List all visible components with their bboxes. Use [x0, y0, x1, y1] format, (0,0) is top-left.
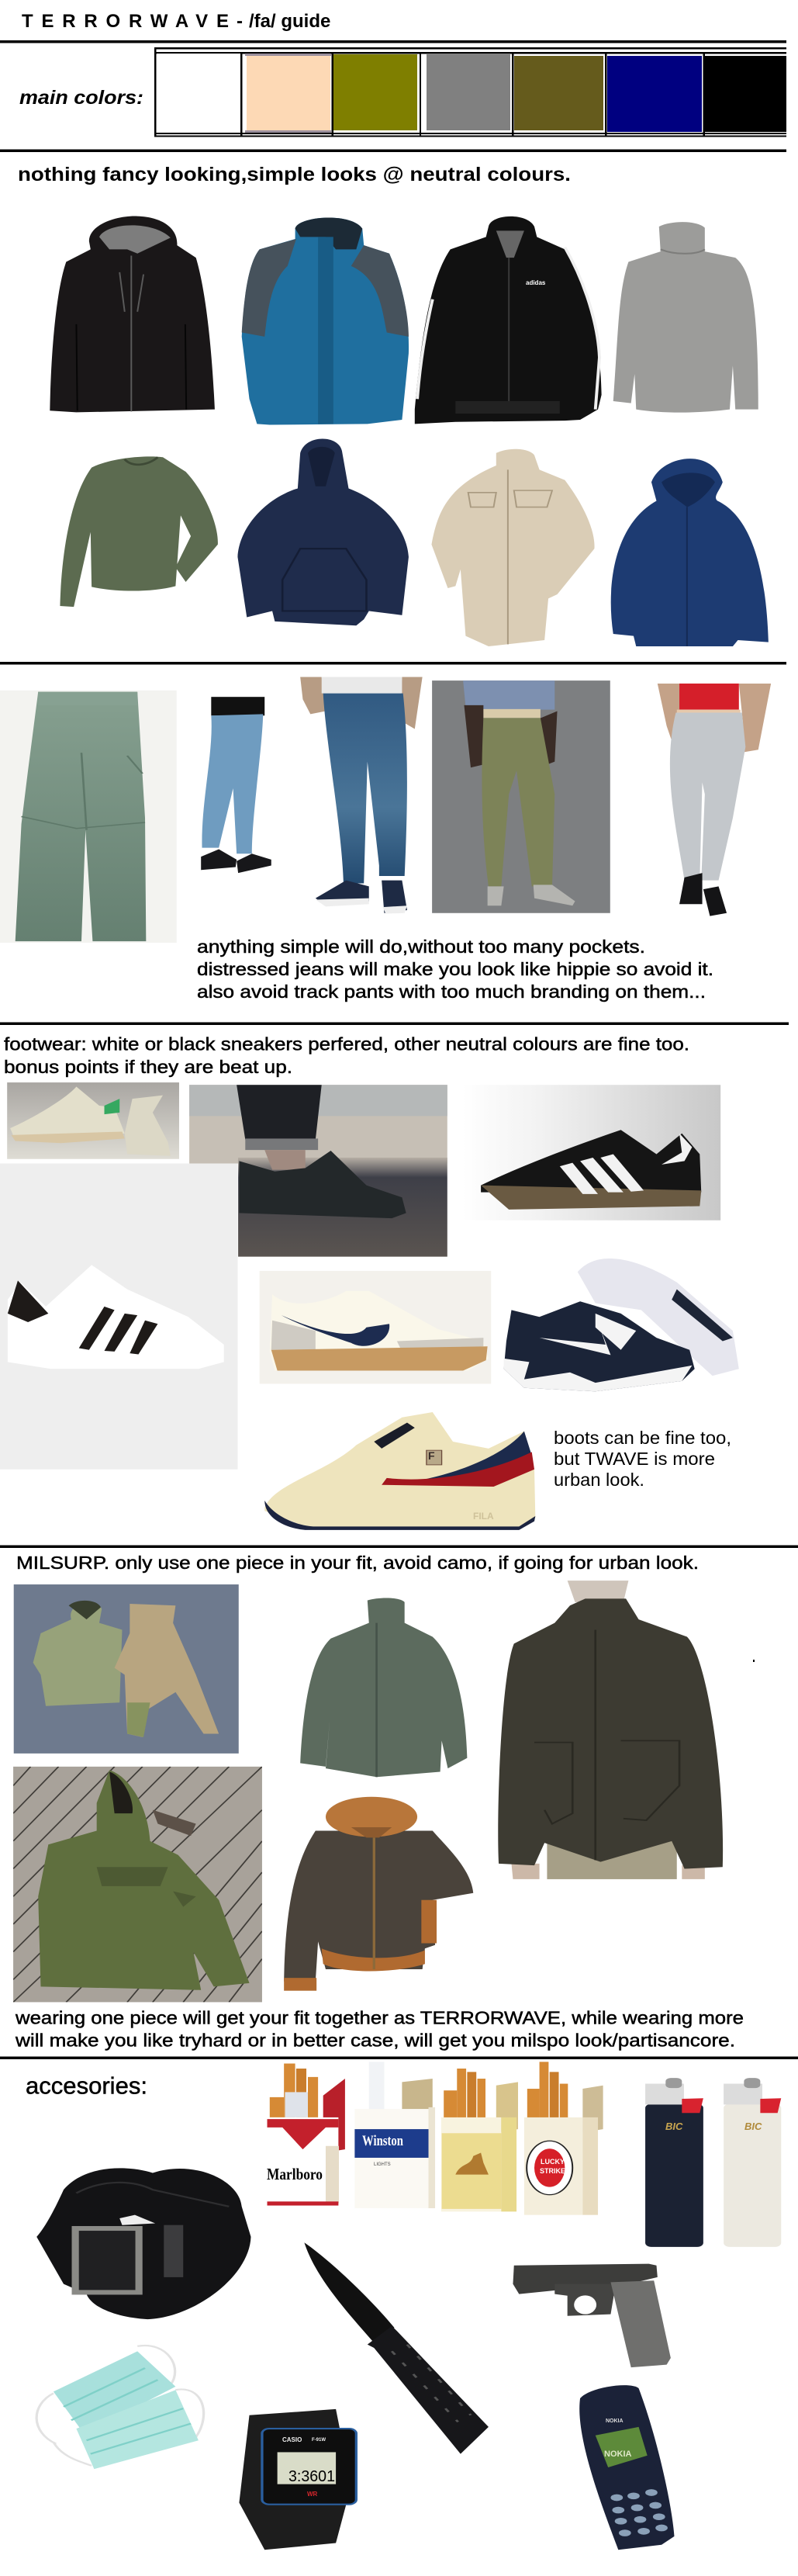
text: milsurp note: wearing one piece will get your fit together as TERRORWAVE, while wearing more — [15, 2008, 744, 2028]
surgical masks — [36, 2346, 204, 2469]
panel: main colors palette — [19, 47, 786, 137]
olive knit sweater — [60, 456, 218, 607]
cigarette pack: Winston — [354, 2062, 435, 2208]
light wash jeans — [201, 697, 271, 873]
lighter: white BIC: BIC — [744, 2121, 762, 2132]
grey turtleneck — [613, 222, 758, 413]
Nokia 3310 phone: NOKIA — [604, 2450, 631, 2459]
Casio digital watch: WR — [307, 2491, 318, 2498]
swatch: black — [705, 56, 786, 132]
Nokia 3310 phone — [579, 2385, 674, 2550]
panel: trousers — [0, 677, 771, 1002]
olive chinos on grey photo — [432, 680, 610, 913]
text: trousers advice: distressed jeans will make you look like hippie so avoid it. — [197, 959, 713, 979]
label: main colors: main colors: — [19, 87, 143, 109]
swatch: navy — [607, 56, 702, 132]
cigarette pack: Camel — [441, 2069, 518, 2211]
swatch: dark olive — [514, 56, 603, 130]
panel: accessories — [26, 2062, 781, 2550]
blue and grey rain jacket — [242, 218, 409, 424]
sage cargo pants photo — [0, 691, 177, 943]
text: trousers advice: anything simple will do,without too many pockets. — [197, 937, 645, 957]
Casio digital watch: F-91W — [312, 2438, 326, 2443]
pistol — [513, 2264, 671, 2367]
lighter: black BIC — [645, 2078, 703, 2247]
cigarette pack: Lucky Strike — [524, 2062, 603, 2215]
Casio digital watch: 3:3601 — [288, 2468, 335, 2485]
text: boots note: boots can be fine too, — [554, 1428, 731, 1448]
dark wash jeans with sneakers — [300, 677, 423, 914]
panel: footwear — [0, 1034, 739, 1530]
dark jacket on mannequin — [498, 1581, 723, 1879]
text: milsurp note: will make you like tryhard or in better case, will get you milspo look/partisancore. — [15, 2030, 735, 2050]
text: milsurp note — [15, 2008, 744, 2050]
beige button shirt — [431, 449, 595, 646]
beat up white sneakers photo — [7, 1082, 179, 1159]
green fleece jacket — [300, 1598, 467, 1777]
cigarette pack: Lucky Strike: STRIKE — [540, 2167, 565, 2175]
cream Fila sneaker: F — [428, 1449, 435, 1462]
black Samba sneaker photo — [462, 1085, 720, 1220]
panel: tops — [18, 164, 769, 646]
panel: milsurp — [13, 1553, 755, 2050]
cigarette pack: Winston: LIGHTS — [374, 2162, 391, 2167]
title: /fa/ guide — [249, 11, 330, 32]
cigarette pack: Lucky Strike: LUCKY — [541, 2158, 565, 2166]
text: trousers advice — [197, 937, 713, 1002]
swatch: gray — [427, 54, 510, 130]
swatch: white — [157, 54, 240, 133]
green anorak on wood deck photo — [13, 1767, 262, 2002]
black track jacket: adidas — [526, 279, 546, 286]
text: footwear advice — [4, 1034, 689, 1077]
black track jacket — [415, 216, 602, 424]
title: TERRORWAVE — [22, 11, 229, 32]
Casio digital watch — [239, 2409, 356, 2550]
text: boots note: urban look. — [554, 1470, 644, 1490]
text: boots note — [554, 1428, 731, 1490]
grey joggers — [658, 684, 771, 916]
Casio digital watch: CASIO — [282, 2436, 302, 2443]
navy hoodie — [237, 438, 409, 625]
text: footwear advice: bonus points if they are beat up. — [4, 1057, 292, 1077]
white Superstar sneaker photo — [0, 1164, 237, 1470]
title — [22, 11, 330, 32]
Nokia 3310 phone: NOKIA — [606, 2418, 624, 2424]
brown shearling bomber jacket — [284, 1797, 473, 1991]
text: boots note: but TWAVE is more — [554, 1449, 715, 1469]
lighter: white BIC — [724, 2078, 781, 2247]
text: trousers advice: also avoid track pants with too much branding on them... — [197, 982, 706, 1002]
black leather belt — [36, 2168, 251, 2319]
cigarette pack: Marlboro: Marlboro — [267, 2165, 323, 2183]
blue hooded windbreaker — [611, 459, 769, 646]
cigarette pack: Marlboro — [267, 2064, 345, 2206]
cigarette pack: Winston: Winston — [362, 2133, 403, 2149]
black New Balance on street photo — [189, 1085, 447, 1257]
navy Air Max sneakers — [504, 1259, 739, 1391]
title: - — [237, 11, 243, 32]
cream Fila sneaker — [264, 1412, 535, 1530]
heading: milsurp: MILSURP. only use one piece in your fit, avoid camo, if going for urban look. — [16, 1553, 699, 1573]
swatch: olive — [333, 54, 417, 130]
heading: tops: nothing fancy looking,simple looks @ neutral colours. — [18, 164, 571, 185]
black shell jacket — [50, 216, 215, 412]
swatch: peach — [247, 56, 330, 130]
heading: accessories: accesories: — [26, 2072, 147, 2100]
parka and trousers on pavement photo — [14, 1584, 239, 1754]
cream Fila sneaker: FILA — [473, 1511, 494, 1522]
text: footwear advice: footwear: white or black sneakers perfered, other neutral colours are fine too. — [4, 1034, 689, 1054]
cream and navy Nike sneaker photo — [260, 1271, 491, 1383]
lighter: black BIC: BIC — [665, 2121, 683, 2132]
butterfly knife — [304, 2242, 489, 2454]
